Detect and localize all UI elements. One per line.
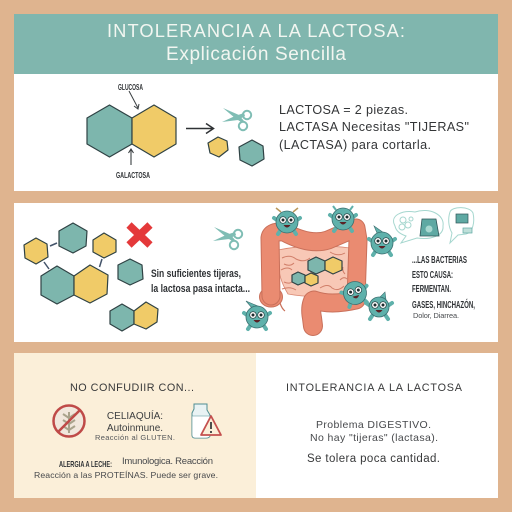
explanation text (279, 103, 469, 152)
text: bacteria effects: FERMENTAN. (412, 284, 451, 295)
panel: what is lactose (14, 14, 498, 191)
thought bubble: bloating (449, 208, 474, 243)
text: celiaquia (95, 409, 175, 442)
panel: lactose intolerance summary (256, 353, 498, 498)
text: milk allergy: Reacción a las PROTEÍNAS. Puede ser grave. (34, 470, 218, 480)
text: celiaquia: Autoinmune. (107, 423, 163, 434)
label: galactosa: GALACTOSA (116, 170, 150, 180)
heading: intolerancia: INTOLERANCIA A LA LACTOSA (286, 382, 463, 394)
text: celiaquia: Reacción al GLUTEN. (95, 433, 175, 442)
text: bacteria effects: Dolor, Diarrea. (413, 311, 459, 320)
illustration: intestines (260, 228, 358, 326)
caption: not enough scissors: la lactosa pasa intacta... (151, 283, 250, 295)
icon: no wheat (54, 406, 84, 436)
panel: undigested lactose and bacteria (14, 203, 498, 342)
title banner: INTOLERANCIA A LA LACTOSA: (107, 20, 405, 41)
summary text: No hay "tijeras" (lactasa). (310, 432, 438, 444)
panel: do not confuse with (14, 353, 256, 498)
icon: red cross (129, 225, 150, 245)
text: milk allergy (34, 456, 218, 480)
title banner: Explicación Sencilla (166, 44, 346, 65)
lactose molecule (87, 105, 176, 157)
arrow: glucosa (129, 91, 139, 109)
summary text (307, 419, 440, 465)
text: bacteria effects: ...LAS BACTERIAS (412, 255, 467, 266)
arrow: galactosa (128, 149, 134, 165)
icon: milk bottle with warning (192, 404, 221, 438)
caption: not enough scissors (151, 268, 250, 295)
text: milk allergy: Imunologica. Reacción (122, 456, 213, 467)
label: glucosa: GLUCOSA (118, 82, 143, 92)
text: bacteria effects (412, 255, 475, 320)
explanation text: LACTASA Necesitas "TIJERAS" (279, 120, 469, 134)
split teal hexagon (239, 140, 264, 166)
heading: no confundir: NO CONFUDIIR CON... (70, 382, 194, 394)
text: celiaquia: CELIAQUÍA: (107, 409, 163, 422)
arrow: to split pieces (186, 124, 214, 134)
explanation text: LACTOSA = 2 piezas. (279, 103, 408, 117)
summary text: Problema DIGESTIVO. (316, 419, 431, 431)
explanation text: (LACTASA) para cortarla. (279, 138, 431, 152)
summary text: Se tolera poca cantidad. (307, 453, 440, 465)
bacteria (244, 206, 395, 329)
loose lactose molecules (24, 223, 158, 331)
icon: faded scissors (213, 227, 242, 249)
caption: not enough scissors: Sin suficientes tijeras, (151, 268, 241, 280)
thought bubble: fermentation (394, 210, 443, 243)
text: milk allergy: ALERGIA A LECHE: (59, 459, 112, 469)
icon: scissors (222, 108, 251, 130)
text: bacteria effects: ESTO CAUSA: (412, 270, 453, 281)
title banner (14, 14, 498, 74)
split yellow hexagon (208, 137, 228, 157)
